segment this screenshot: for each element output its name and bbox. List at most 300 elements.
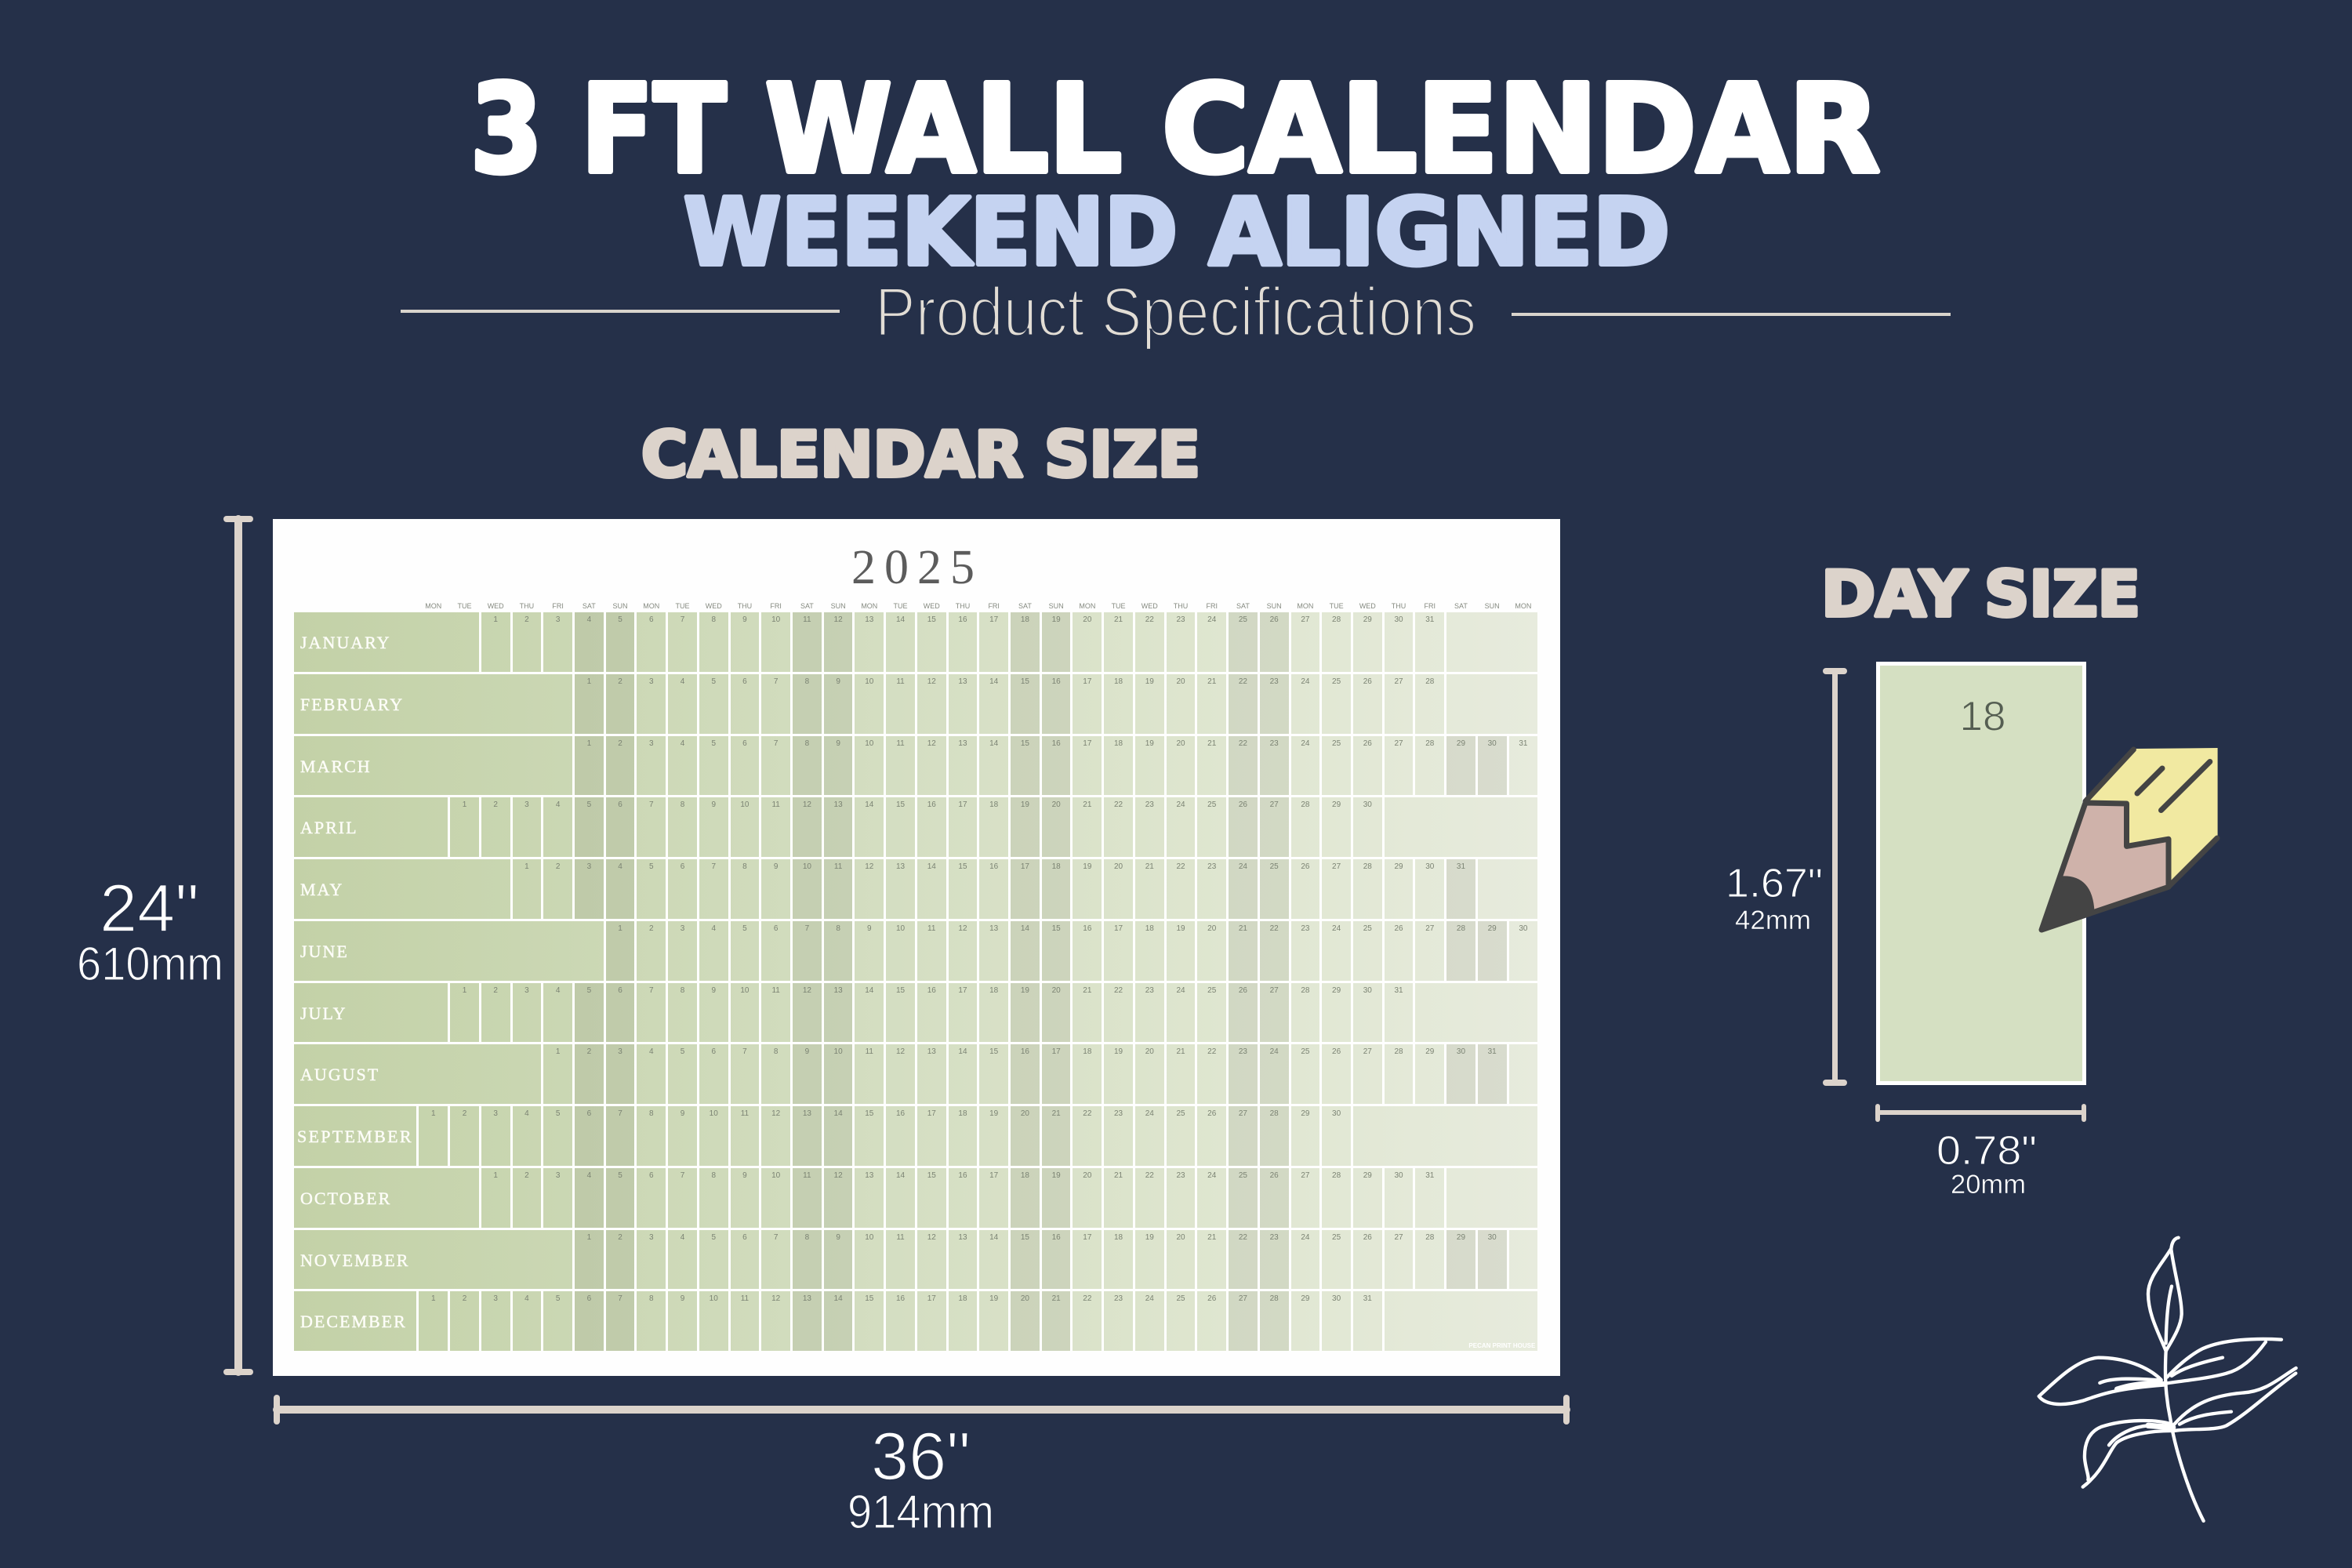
row: december: 15 <box>865 1294 873 1303</box>
heading: calendar size <box>641 419 1200 491</box>
row: august: 3 <box>618 1047 622 1056</box>
row: november: 24 <box>1301 1232 1309 1242</box>
row: april: 25 <box>1207 800 1216 809</box>
row: october: 31 <box>1425 1171 1434 1180</box>
row: may: 17 <box>1021 862 1029 871</box>
row: may <box>294 857 1537 919</box>
row: january: 8 <box>711 615 716 624</box>
row: july: 18 <box>989 986 998 994</box>
row: december: 13 <box>803 1294 811 1303</box>
heading: calendar size: SIZE <box>1044 419 1200 491</box>
row: january <box>294 610 1537 672</box>
row: september: 16 <box>896 1109 905 1118</box>
row: december: 5 <box>556 1294 560 1303</box>
row: february: 20 <box>1176 677 1185 686</box>
weekday header row: THU <box>738 602 752 610</box>
row: may: 4 <box>618 862 622 871</box>
row: august: 14 <box>958 1047 967 1056</box>
row: april: 20 <box>1052 800 1061 809</box>
weekday header row: FRI <box>988 602 1000 610</box>
row: april: 28 <box>1301 800 1309 809</box>
row: november: 19 <box>1145 1232 1154 1242</box>
dimension: day width bar <box>1878 1106 2084 1120</box>
weekday header row: SAT <box>583 602 596 610</box>
heading: calendar size: CALENDAR <box>641 419 1023 491</box>
row: june: 14 <box>1021 924 1029 933</box>
row: january: 20 <box>1083 615 1091 624</box>
row: august: 11 <box>866 1047 873 1056</box>
day cell sample <box>1878 663 2084 1083</box>
row: january: 26 <box>1270 615 1279 624</box>
row: july: 29 <box>1332 986 1341 994</box>
row: january: 14 <box>896 615 905 624</box>
row: july: 27 <box>1270 986 1279 994</box>
row: march: MARCH <box>300 756 372 776</box>
weekday header row: SAT <box>1454 602 1468 610</box>
row: march: 20 <box>1176 739 1185 748</box>
row: september: 21 <box>1052 1109 1061 1118</box>
row: november: 6 <box>742 1232 747 1242</box>
title: 3 <box>470 58 543 201</box>
row: september: 18 <box>958 1109 967 1118</box>
row: july: 15 <box>896 986 905 994</box>
row: june: 23 <box>1301 924 1309 933</box>
heading: day size <box>1821 558 2140 630</box>
row: february: 17 <box>1083 677 1091 686</box>
row: july: 9 <box>711 986 716 994</box>
row: august: 17 <box>1052 1047 1061 1056</box>
row: february: 18 <box>1114 677 1123 686</box>
row: march: 26 <box>1363 739 1372 748</box>
row: march: 22 <box>1239 739 1247 748</box>
row: july: 3 <box>524 986 529 994</box>
row: april: 3 <box>524 800 529 809</box>
weekday header row: SAT <box>800 602 814 610</box>
row: november: NOVEMBER <box>300 1250 409 1270</box>
day cell sample: 18 <box>1960 693 2005 740</box>
weekday header row: WED <box>1142 602 1158 610</box>
row: february: 14 <box>989 677 998 686</box>
row: may: 30 <box>1425 862 1434 871</box>
row: december: 23 <box>1114 1294 1123 1303</box>
row: february: 11 <box>896 677 905 686</box>
row: december: 7 <box>618 1294 622 1303</box>
row: august: 25 <box>1301 1047 1309 1056</box>
row: october: 17 <box>989 1171 998 1180</box>
row: may: 3 <box>587 862 591 871</box>
weekday header row: MON <box>861 602 877 610</box>
row: january: 7 <box>681 615 684 624</box>
weekday header row: SUN <box>1049 602 1064 610</box>
row: july: 22 <box>1114 986 1123 994</box>
row: february: 5 <box>711 677 716 686</box>
row: june: 17 <box>1114 924 1123 933</box>
weekday header row: WED <box>924 602 940 610</box>
dimension label: 1.67 inch: 1.67" <box>1726 861 1823 906</box>
row: december: 20 <box>1021 1294 1029 1303</box>
row: april: 8 <box>681 800 684 809</box>
row: december: 30 <box>1332 1294 1341 1303</box>
row: august: 9 <box>805 1047 809 1056</box>
row: september: 28 <box>1270 1109 1279 1118</box>
row: july: 19 <box>1021 986 1029 994</box>
row: july: 13 <box>834 986 843 994</box>
dimension: day height bar <box>1826 671 1844 1083</box>
row: february: 1 <box>587 677 591 686</box>
row: april: 13 <box>834 800 843 809</box>
row: february: 26 <box>1363 677 1372 686</box>
row: july: 6 <box>618 986 622 994</box>
row: september: 19 <box>989 1109 998 1118</box>
row: april: 11 <box>771 800 780 809</box>
row: november: 27 <box>1394 1232 1403 1242</box>
row: january: 2 <box>524 615 529 624</box>
row: january: 17 <box>989 615 998 624</box>
row: april: 7 <box>649 800 654 809</box>
row: august: 10 <box>834 1047 843 1056</box>
row: october: 30 <box>1394 1171 1403 1180</box>
title <box>470 58 1880 201</box>
row: may: 5 <box>649 862 654 871</box>
row: december: 6 <box>587 1294 591 1303</box>
row: march: 3 <box>649 739 654 748</box>
row: november: 17 <box>1083 1232 1091 1242</box>
weekday header row: MON <box>1297 602 1313 610</box>
row: march: 2 <box>618 739 622 748</box>
weekday header row: THU <box>1392 602 1406 610</box>
dimension label: 24 inch: 24" <box>100 871 199 946</box>
weekday header row: SAT <box>1018 602 1032 610</box>
row: may: 21 <box>1145 862 1154 871</box>
row: december <box>294 1289 1537 1351</box>
row: april: 1 <box>463 800 466 809</box>
row: march: 21 <box>1207 739 1216 748</box>
row: july: 31 <box>1394 986 1403 994</box>
row: march: 23 <box>1270 739 1279 748</box>
row: january: 10 <box>771 615 780 624</box>
row: january: 22 <box>1145 615 1154 624</box>
row: may: 23 <box>1207 862 1216 871</box>
row: october: 25 <box>1239 1171 1247 1180</box>
row: february <box>294 672 1537 734</box>
row: april: 23 <box>1145 800 1154 809</box>
row: may: 11 <box>834 862 842 871</box>
row: october: 20 <box>1083 1171 1091 1180</box>
row: november: 23 <box>1270 1232 1279 1242</box>
row: august: 6 <box>711 1047 716 1056</box>
row: january: 11 <box>803 615 811 624</box>
row: november: 18 <box>1114 1232 1123 1242</box>
row: june: 27 <box>1425 924 1434 933</box>
row: june: 25 <box>1363 924 1372 933</box>
dimension label: 1.67 inch: 42mm <box>1735 906 1811 935</box>
row: june: 3 <box>681 924 684 933</box>
row: february: 12 <box>927 677 936 686</box>
row: october: 22 <box>1145 1171 1154 1180</box>
row: march: 8 <box>805 739 809 748</box>
row: october: 2 <box>524 1171 529 1180</box>
row: june: 28 <box>1457 924 1465 933</box>
weekday header row: TUE <box>894 602 908 610</box>
row: june: 19 <box>1176 924 1185 933</box>
row: december: DECEMBER <box>300 1312 407 1331</box>
row: september: 23 <box>1114 1109 1123 1118</box>
row: november: 2 <box>618 1232 622 1242</box>
row: march: 18 <box>1114 739 1123 748</box>
row: october: 14 <box>896 1171 905 1180</box>
row: october: 13 <box>865 1171 873 1180</box>
row: november: 4 <box>681 1232 684 1242</box>
row: september: 14 <box>834 1109 843 1118</box>
panel: wall calendar <box>273 519 1560 1376</box>
row: august: 29 <box>1425 1047 1434 1056</box>
row: july: 2 <box>493 986 498 994</box>
row: january: 9 <box>742 615 747 624</box>
row: october: 26 <box>1270 1171 1279 1180</box>
row: november: 21 <box>1207 1232 1216 1242</box>
row: march: 9 <box>836 739 840 748</box>
row: january: 3 <box>556 615 560 624</box>
row: september: 4 <box>524 1109 529 1118</box>
row: april: 19 <box>1021 800 1029 809</box>
row: november: 5 <box>711 1232 716 1242</box>
title: WALL <box>765 58 1122 201</box>
row: october: 27 <box>1301 1171 1309 1180</box>
row: december: 3 <box>493 1294 498 1303</box>
row: july: 30 <box>1363 986 1372 994</box>
row: february: 28 <box>1425 677 1434 686</box>
row: april: 14 <box>865 800 873 809</box>
row: july: 23 <box>1145 986 1154 994</box>
weekday header row: TUE <box>676 602 690 610</box>
row: march: 16 <box>1052 739 1061 748</box>
weekday header row: TUE <box>1112 602 1126 610</box>
row: october: 18 <box>1021 1171 1029 1180</box>
row: march: 7 <box>774 739 778 748</box>
row: may: 25 <box>1270 862 1279 871</box>
row: july: 7 <box>649 986 654 994</box>
dimension label: 36 inch <box>848 1419 994 1538</box>
row: february: 6 <box>742 677 747 686</box>
icon: pencil <box>2042 748 2218 930</box>
row: september: 12 <box>771 1109 780 1118</box>
weekday header row: FRI <box>552 602 564 610</box>
row: march: 11 <box>896 739 905 748</box>
row: june: 18 <box>1145 924 1154 933</box>
row: january: 28 <box>1332 615 1341 624</box>
row: december: 27 <box>1239 1294 1247 1303</box>
row: august: AUGUST <box>300 1065 379 1084</box>
row: january: 1 <box>493 615 498 624</box>
row: january: 4 <box>587 615 591 624</box>
row: may: 16 <box>989 862 998 871</box>
row: june: 21 <box>1239 924 1247 933</box>
row: september: 24 <box>1145 1109 1154 1118</box>
row: september: 25 <box>1176 1109 1185 1118</box>
row: september: 5 <box>556 1109 560 1118</box>
row: january: 29 <box>1363 615 1372 624</box>
row: april <box>294 795 1537 857</box>
row: july: 11 <box>771 986 780 994</box>
row: april: 5 <box>587 800 591 809</box>
row: january: 18 <box>1021 615 1029 624</box>
heading: day size: SIZE <box>1984 558 2140 630</box>
row: june: 9 <box>867 924 872 933</box>
row: march: 5 <box>711 739 716 748</box>
row: october: 21 <box>1114 1171 1123 1180</box>
calendar year: 2025 <box>851 541 983 594</box>
weekday header row: MON <box>1515 602 1531 610</box>
row: april: APRIL <box>300 818 358 837</box>
row: november: 3 <box>649 1232 654 1242</box>
row: november: 1 <box>587 1232 591 1242</box>
row: march: 31 <box>1519 739 1527 748</box>
row: april: 6 <box>618 800 622 809</box>
row: october: 3 <box>556 1171 560 1180</box>
row: november: 16 <box>1052 1232 1061 1242</box>
row: june: 30 <box>1519 924 1527 933</box>
weekday header row: THU <box>956 602 970 610</box>
dimension label: 36 inch: 914mm <box>848 1486 994 1538</box>
dimension: calendar height bar <box>227 519 250 1372</box>
row: july: 4 <box>556 986 560 994</box>
row: october: 23 <box>1176 1171 1185 1180</box>
row: august: 16 <box>1021 1047 1029 1056</box>
row: july <box>294 980 1537 1042</box>
row: august: 30 <box>1457 1047 1465 1056</box>
row: october: 28 <box>1332 1171 1341 1180</box>
row: december: 22 <box>1083 1294 1091 1303</box>
weekday header row: THU <box>520 602 534 610</box>
row: october: 19 <box>1052 1171 1061 1180</box>
calendar grid <box>294 610 1537 1351</box>
row: may: 9 <box>774 862 778 871</box>
row: march: 14 <box>989 739 998 748</box>
row: september: 20 <box>1021 1109 1029 1118</box>
row: september: 10 <box>710 1109 718 1118</box>
row: may: 8 <box>742 862 747 871</box>
row: march: 29 <box>1457 739 1465 748</box>
row: december: 25 <box>1176 1294 1185 1303</box>
row: august: 18 <box>1083 1047 1091 1056</box>
row: may: 22 <box>1176 862 1185 871</box>
row: october <box>294 1166 1537 1228</box>
row: june: 11 <box>927 924 935 933</box>
row: november <box>294 1228 1537 1289</box>
row: september: 9 <box>681 1109 684 1118</box>
row: june <box>294 919 1537 980</box>
row: july: 8 <box>681 986 684 994</box>
row: september: 22 <box>1083 1109 1091 1118</box>
row: may: 24 <box>1239 862 1247 871</box>
row: august: 7 <box>742 1047 747 1056</box>
row: december: 29 <box>1301 1294 1309 1303</box>
row: december: 16 <box>896 1294 905 1303</box>
row: march: 17 <box>1083 739 1091 748</box>
row: march: 28 <box>1425 739 1434 748</box>
row: july: 28 <box>1301 986 1309 994</box>
watermark: PECAN PRINT HOUSE <box>1468 1342 1535 1349</box>
row: december: 8 <box>649 1294 654 1303</box>
row: november: 25 <box>1332 1232 1341 1242</box>
weekday header row: WED <box>1359 602 1376 610</box>
row: november: 7 <box>774 1232 778 1242</box>
row: may: 7 <box>711 862 716 871</box>
row: october: 5 <box>618 1171 622 1180</box>
row: february: 9 <box>836 677 840 686</box>
title: CALENDAR <box>1162 58 1880 201</box>
row: june: 7 <box>805 924 809 933</box>
row: november: 20 <box>1176 1232 1185 1242</box>
row: february: 23 <box>1270 677 1279 686</box>
row: may: 10 <box>803 862 811 871</box>
row: april: 29 <box>1332 800 1341 809</box>
row: january: 13 <box>865 615 873 624</box>
row: august: 27 <box>1363 1047 1372 1056</box>
row: october: 6 <box>649 1171 654 1180</box>
row: november: 11 <box>896 1232 905 1242</box>
row: july: JULY <box>300 1004 347 1022</box>
row: august: 12 <box>896 1047 905 1056</box>
row: february: 19 <box>1145 677 1154 686</box>
row: december: 31 <box>1363 1294 1372 1303</box>
weekday header row: MON <box>643 602 659 610</box>
row: august: 8 <box>774 1047 778 1056</box>
row: february: 4 <box>681 677 684 686</box>
weekday header row: WED <box>706 602 722 610</box>
row: june: 15 <box>1052 924 1061 933</box>
weekday header row: WED <box>488 602 504 610</box>
row: october: 10 <box>771 1171 780 1180</box>
subtitle: WEEKEND <box>684 178 1178 286</box>
row: december: 17 <box>927 1294 936 1303</box>
dimension label: 24 inch: 610mm <box>77 938 223 990</box>
row: november: 10 <box>865 1232 873 1242</box>
row: june: 5 <box>742 924 747 933</box>
row: may: 18 <box>1052 862 1061 871</box>
row: october: 4 <box>587 1171 591 1180</box>
row: august: 5 <box>681 1047 684 1056</box>
row: october: 1 <box>493 1171 498 1180</box>
row: october: 29 <box>1363 1171 1372 1180</box>
row: february: 15 <box>1021 677 1029 686</box>
row: april: 2 <box>493 800 498 809</box>
row: april: 12 <box>803 800 811 809</box>
row: september: 13 <box>803 1109 811 1118</box>
row: december: 11 <box>741 1294 749 1303</box>
row: september: 2 <box>463 1109 466 1118</box>
row: january: 27 <box>1301 615 1309 624</box>
row: december: 4 <box>524 1294 529 1303</box>
row: february: 3 <box>649 677 654 686</box>
row: december: 21 <box>1052 1294 1061 1303</box>
row: august: 19 <box>1114 1047 1123 1056</box>
row: july: 16 <box>927 986 936 994</box>
row: january: 5 <box>618 615 622 624</box>
row: june: 1 <box>618 924 622 933</box>
row: november: 29 <box>1457 1232 1465 1242</box>
row: june: JUNE <box>300 942 349 961</box>
row: february: FEBRUARY <box>300 695 404 714</box>
row: january: 30 <box>1394 615 1403 624</box>
row: november: 12 <box>927 1232 936 1242</box>
row: february: 25 <box>1332 677 1341 686</box>
weekday header row: MON <box>425 602 441 610</box>
row: march: 19 <box>1145 739 1154 748</box>
row: february: 16 <box>1052 677 1061 686</box>
row: september: 6 <box>587 1109 591 1118</box>
row: april: 26 <box>1239 800 1247 809</box>
